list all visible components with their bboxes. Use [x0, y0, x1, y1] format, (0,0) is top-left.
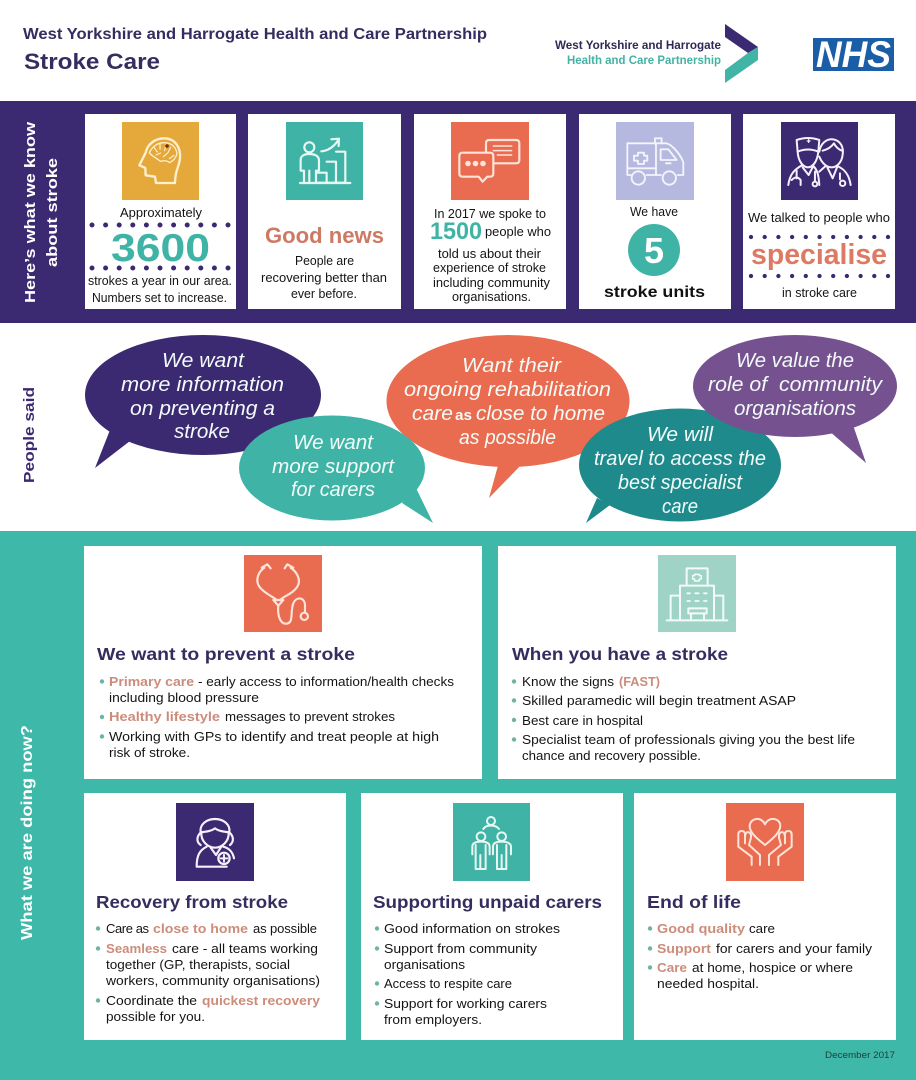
stat: specialise: specialise	[751, 239, 887, 271]
speech bubble: travel to specialist care: travel to access the	[594, 448, 766, 470]
speech bubble: support for carers: for carers	[291, 479, 375, 501]
text: we talked to people who: We talked to people who	[748, 211, 890, 225]
list: carer support: Support for working carers	[384, 996, 548, 1011]
logo: partnership	[555, 24, 758, 83]
panel heading: people said: People said	[21, 387, 38, 483]
list: end of life care: at home, hospice or where	[692, 960, 853, 975]
speech bubble: support for carers: We want	[293, 432, 374, 454]
speech bubble: rehabilitation close to home: as	[455, 407, 472, 424]
text: people who told us: told us about their	[438, 247, 541, 261]
speech bubble: rehabilitation close to home: ongoing rehabilitation	[404, 379, 611, 401]
text: recovering better: recovering better than	[261, 271, 387, 285]
list: stroke treatment: Skilled paramedic will begin treatment ASAP	[522, 693, 796, 708]
text: recovering better	[261, 254, 387, 301]
speech bubble: community organisations: We value the	[736, 350, 854, 372]
panel: what we are doing now	[0, 531, 916, 1080]
list: carer support: organisations	[384, 957, 466, 972]
text: recovering better: ever before.	[291, 287, 357, 301]
panel heading: what we know	[22, 122, 61, 303]
speech bubble: rehabilitation close to home: Want their	[462, 355, 562, 377]
text: strokes a year: strokes a year in our area.	[88, 274, 232, 288]
stat: 1500: 1500	[430, 218, 482, 245]
heading: good news: Good news	[265, 223, 384, 248]
list: recovery actions: close to home	[153, 921, 248, 936]
heading: end of life: End of life	[647, 892, 741, 912]
list: prevention actions: Working with GPs to identify and treat people at high	[109, 729, 439, 744]
list: recovery actions: Seamless	[106, 941, 167, 956]
text: people who told us: including community	[433, 276, 551, 290]
stat: 3600: 3600	[111, 227, 210, 270]
list: end of life care: Support	[657, 941, 712, 956]
stat: 5 in circle: 5	[644, 230, 664, 271]
list: end of life care: care	[749, 921, 775, 936]
speech bubble: support for carers	[239, 416, 433, 523]
text: strokes a year	[88, 274, 232, 305]
icon: doctors	[781, 122, 858, 200]
card: when you have a stroke	[498, 546, 896, 779]
text: in stroke care: in stroke care	[782, 286, 857, 300]
logo: partnership: West Yorkshire and Harrogate	[555, 38, 721, 52]
card: 3600 strokes	[85, 114, 236, 309]
text: people who told us	[433, 225, 551, 304]
list: prevention actions: including blood pressure	[109, 690, 259, 705]
card: 1500 people	[414, 114, 566, 309]
title: Stroke Care	[24, 49, 160, 74]
text: we have: We have	[630, 205, 678, 219]
panel heading: what we are doing now: What we are doing now?	[19, 725, 36, 940]
panel heading: what we know: about stroke	[44, 158, 61, 267]
list: recovery actions: possible for you.	[106, 1009, 205, 1024]
stat: 5 in circle	[628, 224, 680, 276]
list: carer support	[375, 921, 561, 1027]
speech bubble: travel to specialist care: best specialist	[618, 472, 743, 494]
text: people who told us: experience of stroke	[433, 261, 546, 275]
heading: recovery from stroke: Recovery from stroke	[96, 892, 288, 912]
speech bubble: more information	[85, 335, 321, 468]
list: stroke treatment: (FAST)	[619, 674, 660, 689]
speech bubble: more information: stroke	[174, 421, 230, 443]
icon: hospital	[658, 555, 736, 632]
text: approximately: Approximately	[120, 206, 203, 220]
speech bubble: more information: We want	[162, 350, 246, 372]
list: end of life care: Care	[657, 960, 687, 975]
speech bubble: community organisations: role of community	[708, 374, 883, 396]
text: stroke units: stroke units	[604, 284, 705, 301]
list: recovery actions: workers, community organisations)	[105, 973, 320, 988]
list: recovery actions: Care as	[106, 921, 150, 936]
footer date: December 2017	[825, 1050, 895, 1061]
icon: ambulance	[616, 122, 694, 200]
card: end of life	[634, 793, 896, 1040]
card: prevent a stroke	[84, 546, 482, 779]
card: recovery from stroke	[84, 793, 346, 1040]
panel: people said	[0, 323, 916, 531]
header subtitle: partnership name: West Yorkshire and Harrogate Health and Care Partnership	[23, 26, 487, 43]
icon: speech bubbles	[451, 122, 529, 200]
speech bubble: rehabilitation close to home	[386, 335, 630, 498]
list: carer support: from employers.	[384, 1012, 482, 1027]
list: carer support: Good information on strokes	[384, 921, 561, 936]
card: specialise	[743, 114, 895, 309]
list: end of life care: Good quality	[657, 921, 746, 936]
speech bubble: travel to specialist care: care	[662, 496, 698, 518]
list: carer support: Support from community	[384, 941, 538, 956]
list: prevention actions: risk of stroke.	[109, 745, 190, 760]
list: stroke treatment: chance and recovery possible.	[522, 748, 701, 763]
list: recovery actions	[96, 921, 321, 1024]
speech bubble: rehabilitation close to home: close to home	[476, 403, 605, 425]
speech bubble: support for carers: more support	[272, 456, 395, 478]
card: 5 stroke units	[579, 114, 731, 309]
list: stroke treatment: Best care in hospital	[522, 713, 643, 728]
heading: supporting unpaid carers: Supporting unpaid carers	[373, 892, 602, 912]
list: recovery actions: Coordinate the	[106, 993, 197, 1008]
panel: what we know about stroke	[0, 101, 916, 323]
list: stroke treatment: Specialist team of professionals giving you the best life	[522, 732, 855, 747]
list: recovery actions: care - all teams working	[172, 941, 318, 956]
list: recovery actions: together (GP, therapists, social	[106, 957, 290, 972]
icon: heart in hands	[726, 803, 804, 881]
logo: NHS: NHS	[816, 34, 891, 75]
list: prevention actions: messages to prevent strokes	[225, 709, 395, 724]
list: recovery actions: quickest recovery	[202, 993, 321, 1008]
heading: when you have a stroke: When you have a stroke	[512, 644, 728, 664]
list: stroke treatment	[512, 674, 855, 763]
card: supporting unpaid carers	[361, 793, 623, 1040]
list: prevention actions: - early access to information/health checks	[198, 674, 455, 689]
list: stroke treatment: Know the signs	[522, 674, 615, 689]
list: recovery actions: as possible	[253, 921, 317, 936]
icon: stethoscope	[244, 555, 322, 632]
list: prevention actions: Healthy lifestyle	[109, 709, 220, 724]
card: good news	[248, 114, 401, 309]
list: end of life care: for carers and your family	[716, 941, 873, 956]
speech bubble: more information: on preventing a	[130, 398, 275, 420]
speech bubble: community organisations	[693, 335, 897, 463]
list: end of life care: needed hospital.	[657, 976, 759, 991]
speech bubble: community organisations: organisations	[734, 398, 856, 420]
icon: carers group	[453, 803, 530, 881]
speech bubble: travel to specialist care	[579, 408, 781, 523]
speech bubble: rehabilitation close to home: care	[412, 403, 453, 425]
list: prevention actions	[100, 674, 455, 760]
panel heading: what we know: Here’s what we know	[22, 122, 39, 303]
list: carer support: Access to respite care	[384, 976, 512, 991]
list: prevention actions: Primary care	[109, 674, 194, 689]
heading: prevent a stroke: We want to prevent a stroke	[97, 644, 355, 664]
text: people who told us: organisations.	[452, 290, 531, 304]
icon: nurse	[176, 803, 254, 881]
speech bubble: more information: more information	[121, 374, 284, 396]
list: end of life care	[648, 921, 873, 991]
speech bubble: rehabilitation close to home: as possible	[459, 427, 556, 449]
text: in 2017 we spoke to: In 2017 we spoke to	[434, 207, 546, 221]
icon: brain in head	[122, 122, 199, 200]
text: strokes a year: Numbers set to increase.	[92, 291, 227, 305]
text: people who told us: people who	[485, 225, 551, 239]
icon: person and rising chart	[286, 122, 363, 200]
text: recovering better: People are	[295, 254, 354, 268]
header	[23, 24, 894, 83]
speech bubble: travel to specialist care: We will	[647, 424, 714, 446]
logo: partnership: Health and Care Partnership	[567, 53, 721, 67]
